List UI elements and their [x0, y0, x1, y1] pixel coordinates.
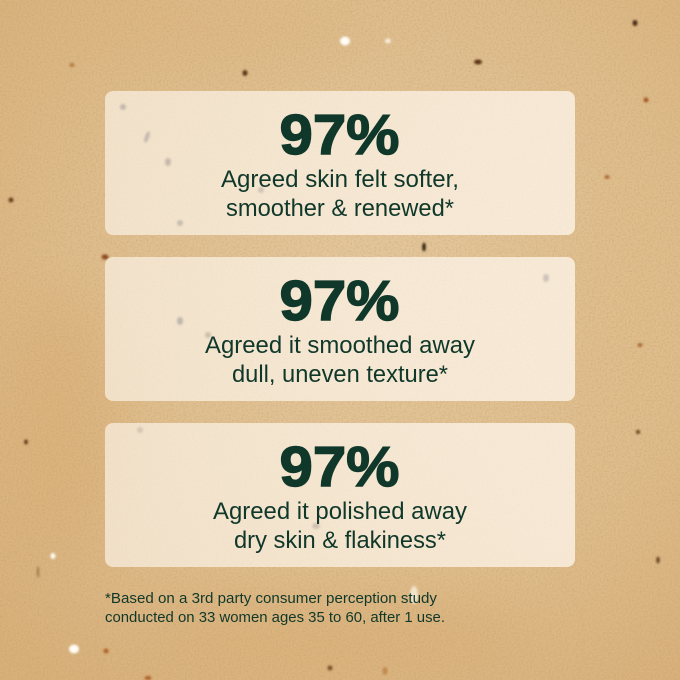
footnote: conducted on 33 women ages 35 to 60, after 1 use.	[105, 609, 445, 626]
description	[213, 498, 467, 554]
description: Agreed skin felt softer,	[221, 166, 459, 193]
stat: 97%: 97%	[280, 269, 400, 333]
description	[205, 332, 475, 388]
description	[221, 166, 459, 222]
description: Agreed it polished away	[213, 498, 467, 525]
panel: smoothed texture stat	[105, 257, 575, 401]
description: dry skin & flakiness*	[234, 527, 446, 554]
footnote: *Based on a 3rd party consumer perception study	[105, 590, 438, 607]
description: dull, uneven texture*	[232, 361, 448, 388]
footnote	[105, 590, 445, 626]
stat: 97%: 97%	[280, 103, 400, 167]
panel background	[105, 423, 575, 567]
panel: softer skin stat	[105, 91, 575, 235]
description: Agreed it smoothed away	[205, 332, 475, 359]
stat: 97%: 97%	[280, 435, 400, 499]
panel background	[105, 257, 575, 401]
panel background	[105, 91, 575, 235]
description: smoother & renewed*	[226, 195, 454, 222]
panel: dry skin stat	[105, 423, 575, 567]
